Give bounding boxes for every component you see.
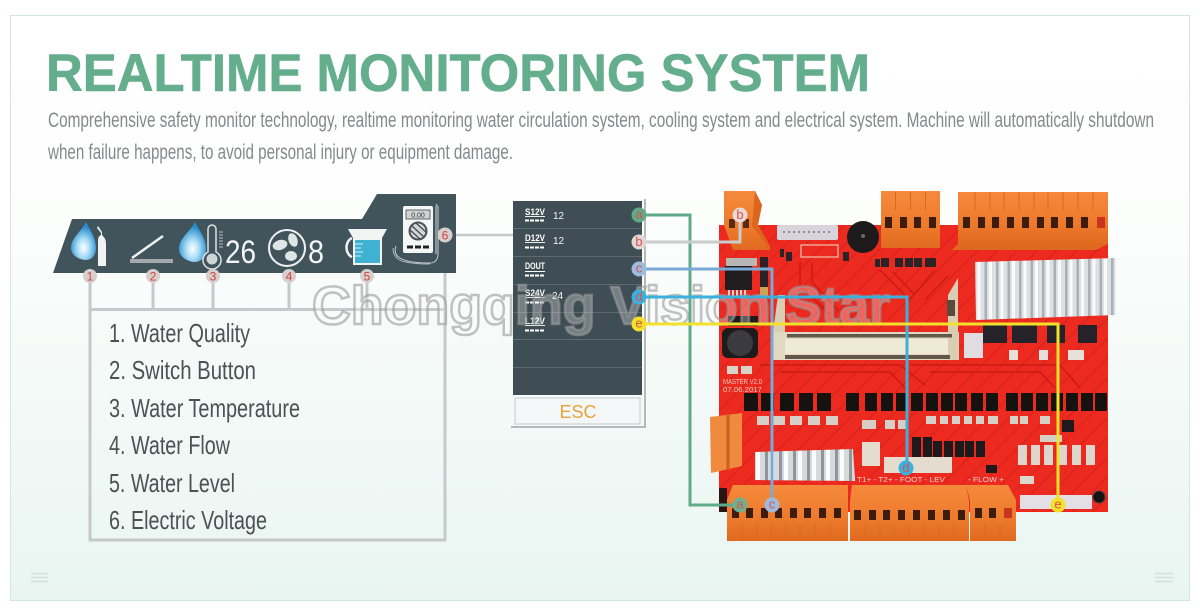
wire c: blue bbox=[638, 269, 772, 505]
footer icon: right menu bbox=[1155, 574, 1173, 582]
wire a: green bbox=[638, 215, 740, 505]
white header bbox=[777, 225, 838, 240]
ESC values: 12 bbox=[553, 211, 565, 222]
lettered badges bbox=[632, 206, 1066, 512]
memory card socket bbox=[773, 278, 959, 360]
lettered badges: b bbox=[635, 234, 643, 249]
connector lines: icons to list bbox=[90, 235, 514, 540]
lettered badges: e bbox=[1054, 496, 1062, 512]
icon: water level bbox=[346, 229, 387, 265]
right side passives bbox=[1018, 445, 1095, 484]
icon: water flow bbox=[269, 230, 305, 266]
white 8-pin connector bbox=[1020, 495, 1092, 509]
board printed labels: T1+ - T2+ - FOOT - LEV bbox=[857, 477, 945, 484]
lettered badges: c bbox=[636, 260, 643, 276]
numbered badges 1-6 bbox=[83, 228, 452, 284]
ESC panel bbox=[511, 199, 645, 427]
top middle orange connector bbox=[881, 191, 940, 248]
icon: multimeter: 0.00 bbox=[411, 212, 425, 220]
left side orange connector bbox=[710, 413, 742, 473]
small heatsink bbox=[755, 449, 855, 481]
date label: 07.06.2017 bbox=[723, 387, 762, 394]
description text: when failure happens, to avoid personal injury or equipment damage. bbox=[47, 141, 513, 164]
flow value: 8 bbox=[308, 234, 324, 270]
footer icon: left menu bbox=[31, 574, 48, 582]
top right orange connector bbox=[952, 192, 1108, 250]
list of monitored items: 3. Water Temperature bbox=[109, 393, 300, 423]
board traces bbox=[760, 262, 1080, 388]
ESC rows: DOUT bbox=[525, 261, 545, 271]
white small connector bbox=[964, 333, 983, 358]
temperature value: 26 bbox=[225, 234, 256, 270]
numbered badges 1-6: 4 bbox=[286, 270, 293, 284]
numbered badges 1-6: 2 bbox=[150, 270, 157, 284]
list of monitored items: 2. Switch Button bbox=[109, 355, 256, 385]
inductor bbox=[722, 328, 758, 358]
mount hole bbox=[1093, 491, 1105, 503]
small SOP chips bbox=[983, 325, 1097, 343]
icon: water temperature bbox=[179, 222, 223, 269]
description text bbox=[47, 109, 1154, 164]
white 2-pin connectors bbox=[862, 442, 952, 473]
wire d: cyan bbox=[638, 297, 907, 468]
bottom middle orange connector bbox=[850, 485, 969, 541]
list of monitored items: 1. Water Quality bbox=[109, 318, 250, 348]
ESC values: 12 bbox=[553, 236, 565, 247]
bottom left orange connector bbox=[727, 485, 848, 541]
icon: multimeter bbox=[393, 204, 438, 264]
buzzer bbox=[847, 221, 879, 253]
ESC button bbox=[515, 398, 640, 424]
resistors row bbox=[757, 416, 1062, 442]
lettered badges: b bbox=[736, 207, 744, 222]
ESC rows bbox=[525, 207, 545, 330]
ESC rows: S12V bbox=[525, 207, 545, 217]
big heatsink bbox=[975, 258, 1116, 320]
list of monitored items: 6. Electric Voltage bbox=[109, 505, 267, 535]
ESC values bbox=[552, 211, 565, 302]
small pads bbox=[727, 366, 752, 374]
bottom right orange connector bbox=[966, 485, 1016, 541]
capacitor pad bbox=[728, 316, 758, 326]
numbered badges 1-6: 3 bbox=[210, 270, 217, 284]
status icon bar bbox=[53, 194, 456, 273]
watermark: Chongqing Vision Star bbox=[312, 276, 890, 336]
regulator chip bbox=[725, 257, 768, 296]
wire e: yellow bbox=[638, 324, 1058, 505]
small parts below chips bbox=[1009, 350, 1084, 360]
header pads bbox=[801, 245, 838, 257]
master label: MASTER V2.0 bbox=[723, 379, 762, 386]
list of monitored items: 5. Water Level bbox=[109, 468, 235, 498]
lettered badges: a bbox=[635, 206, 643, 222]
list of monitored items bbox=[109, 318, 300, 535]
lettered badges: a bbox=[736, 496, 744, 512]
board notch bbox=[719, 488, 727, 512]
flow label: - FLOW + bbox=[968, 477, 1004, 484]
icon: switch button bbox=[130, 236, 173, 263]
circuit board bbox=[710, 191, 1116, 541]
MOSFET pads bbox=[912, 420, 1074, 473]
top left orange connector bbox=[724, 191, 770, 250]
title: REALTIME MONITORING SYSTEM bbox=[46, 44, 870, 103]
icon: water quality bbox=[71, 222, 106, 266]
lettered badges: c bbox=[769, 496, 776, 512]
lettered badges: d bbox=[902, 460, 910, 475]
ESC button: ESC bbox=[559, 402, 597, 422]
optocoupler row bbox=[744, 393, 1107, 411]
list of monitored items: 4. Water Flow bbox=[109, 430, 230, 460]
ESC rows: L12V bbox=[525, 316, 545, 326]
lettered badges: d bbox=[635, 289, 643, 304]
numbered badges 1-6: 6 bbox=[442, 228, 449, 242]
wire b: grey bbox=[638, 215, 740, 242]
board body bbox=[719, 225, 1108, 512]
numbered badges 1-6: 1 bbox=[87, 270, 94, 284]
lettered badges: e bbox=[635, 316, 643, 330]
ESC values: 24 bbox=[552, 291, 564, 302]
ESC rows: D12V bbox=[525, 233, 545, 243]
ESC rows: S24V bbox=[525, 288, 545, 298]
small parts near top bbox=[780, 249, 936, 267]
numbered badges 1-6: 5 bbox=[364, 270, 371, 284]
